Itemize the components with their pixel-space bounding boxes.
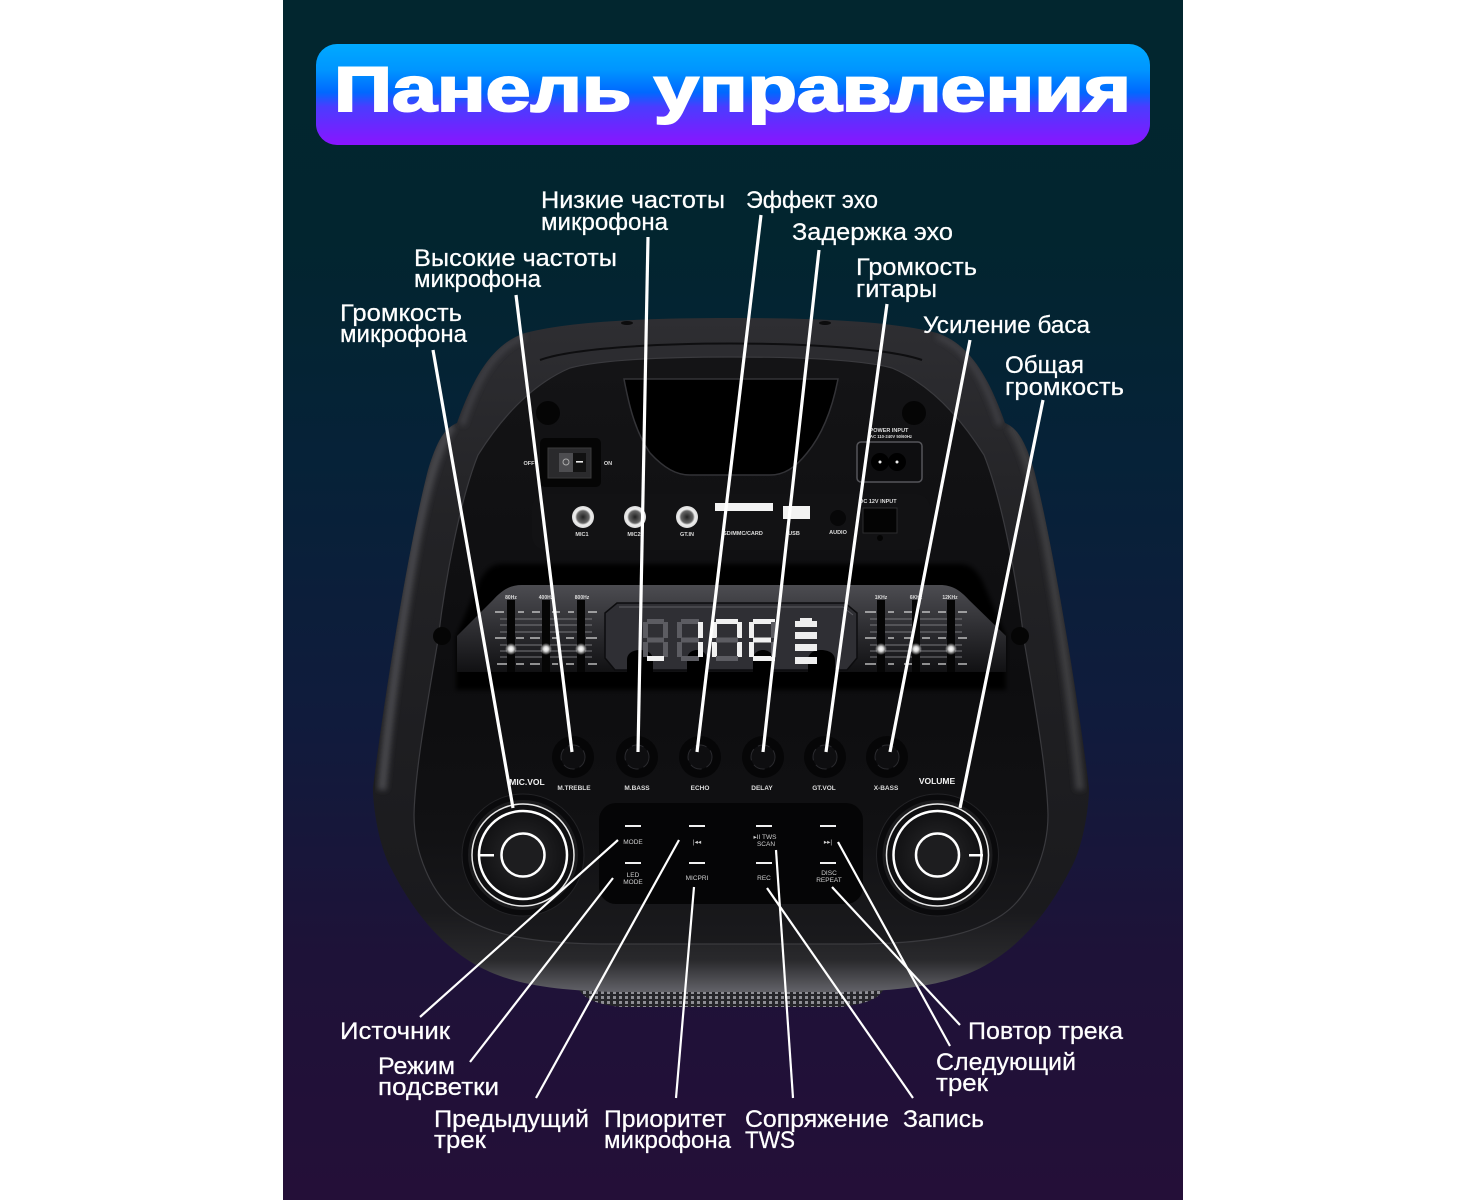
top screws	[621, 321, 831, 325]
label: mic priority	[604, 1106, 732, 1154]
input strip: SD/MMC/CARD	[723, 531, 763, 537]
label: next track: трек	[936, 1070, 989, 1097]
power switch: ON	[604, 461, 612, 467]
touch button pad: ▸II TWS	[753, 834, 777, 841]
input strip	[532, 494, 930, 550]
back panel holes	[433, 401, 1029, 645]
equalizer bar	[457, 585, 1006, 672]
label: bass boost: Усиление баса	[923, 312, 1091, 339]
upper inset line	[540, 344, 922, 360]
knob labels: M.TREBLE	[557, 785, 591, 792]
leader lines	[420, 215, 1043, 1098]
input strip: AUDIO	[829, 530, 848, 536]
knob labels: M.BASS	[624, 785, 650, 792]
label: previous track: трек	[434, 1127, 487, 1154]
touch button pad: MICPRI	[686, 875, 709, 882]
touch button pad: LED	[627, 872, 640, 879]
input strip: MIC1	[575, 532, 589, 538]
label: LED mode: Режим	[378, 1053, 455, 1080]
touch button pad	[599, 803, 863, 904]
background panel	[283, 0, 1183, 1200]
label: mic priority: Приоритет	[604, 1106, 726, 1133]
left equalizer sliders: 80Hz	[505, 595, 517, 601]
title banner: Панель управления	[334, 55, 1131, 125]
power switch	[524, 438, 612, 487]
digit one	[643, 619, 668, 661]
title banner	[316, 44, 1150, 145]
inner panel	[414, 357, 1048, 944]
label: next track: Следующий	[936, 1049, 1076, 1076]
label: guitar volume	[856, 254, 977, 303]
right equalizer sliders: 1KHz	[875, 595, 888, 601]
digit three	[712, 619, 742, 661]
knob labels: X-BASS	[874, 785, 899, 792]
label: source: Источник	[340, 1018, 451, 1045]
label: TWS pairing	[745, 1106, 889, 1154]
label: previous track	[434, 1106, 589, 1154]
knob labels: DELAY	[751, 785, 773, 792]
label: master volume	[1005, 352, 1124, 401]
speaker grill	[578, 988, 884, 1007]
input strip: USB	[788, 531, 800, 537]
handle cut-out	[624, 379, 838, 475]
touch button pad: ▸▸|	[824, 839, 832, 846]
left equalizer sliders: 400Hz	[539, 595, 554, 601]
label: TWS pairing: Сопряжение	[745, 1106, 889, 1133]
label: guitar volume: гитары	[856, 276, 937, 303]
label: delay: Задержка эхо	[792, 219, 953, 246]
shell highlights	[382, 336, 1080, 790]
label: mic treble: микрофона	[414, 266, 542, 293]
input strip: MIC2	[627, 532, 641, 538]
power input socket: AC 110-240V 50/60Hz	[870, 434, 912, 439]
label: next track	[936, 1049, 1076, 1097]
touch button pad: |◂◂	[693, 839, 702, 846]
input strip: DC 12V INPUT	[859, 499, 897, 505]
knob labels: ECHO	[691, 785, 709, 792]
label: mic volume: микрофона	[340, 321, 468, 348]
small knobs	[552, 736, 908, 778]
touch button pad: REPEAT	[816, 877, 842, 884]
LED display	[605, 603, 857, 672]
right equalizer sliders	[865, 595, 967, 672]
label: echo: Эффект эхо	[746, 187, 878, 214]
label: mic bass	[541, 187, 725, 236]
speaker body shell	[373, 318, 1089, 992]
left equalizer sliders	[495, 595, 597, 672]
label: record: Запись	[903, 1106, 984, 1133]
infographic canvas	[283, 0, 1183, 1200]
knob labels: GT.VOL	[812, 785, 836, 792]
label: mic priority: микрофона	[604, 1127, 732, 1154]
label: mic volume	[340, 300, 468, 348]
knob labels: MIC.VOL	[509, 777, 545, 787]
label: mic bass: микрофона	[541, 209, 669, 236]
label: master volume: Общая	[1005, 352, 1084, 379]
digit two	[677, 619, 703, 661]
knob labels: VOLUME	[919, 776, 956, 786]
label: repeat track: Повтор трека	[968, 1018, 1124, 1045]
left equalizer sliders: 800Hz	[575, 595, 590, 601]
label: mic volume: Громкость	[340, 300, 462, 327]
power switch: OFF	[524, 461, 535, 467]
label: mic treble: Высокие частоты	[414, 245, 617, 272]
touch button pad: MODE	[623, 839, 643, 846]
label: TWS pairing: TWS	[745, 1127, 795, 1154]
speaker device	[373, 318, 1089, 1007]
label: previous track: Предыдущий	[434, 1106, 589, 1133]
touch button pad: MODE	[623, 879, 643, 886]
label: LED mode	[378, 1053, 499, 1101]
label: mic bass: Низкие частоты	[541, 187, 725, 214]
knob: master volume	[876, 794, 998, 916]
label: guitar volume: Громкость	[856, 254, 977, 281]
touch button pad: DISC	[821, 870, 837, 877]
label: LED mode: подсветки	[378, 1074, 499, 1101]
power input socket: POWER INPUT	[870, 428, 909, 434]
label: master volume: громкость	[1005, 374, 1124, 401]
equalizer cavity	[456, 564, 1006, 690]
touch button pad: SCAN	[757, 841, 775, 848]
right equalizer sliders: 6KHz	[910, 595, 923, 601]
label: mic treble	[414, 245, 617, 293]
battery indicator	[795, 618, 817, 664]
knob labels	[509, 776, 956, 792]
power input socket	[857, 428, 922, 482]
touch button pad: REC	[757, 875, 771, 882]
knob: mic volume	[462, 794, 584, 916]
input strip: GT.IN	[680, 532, 694, 538]
digit four	[749, 619, 776, 661]
right equalizer sliders: 12KHz	[942, 595, 958, 601]
